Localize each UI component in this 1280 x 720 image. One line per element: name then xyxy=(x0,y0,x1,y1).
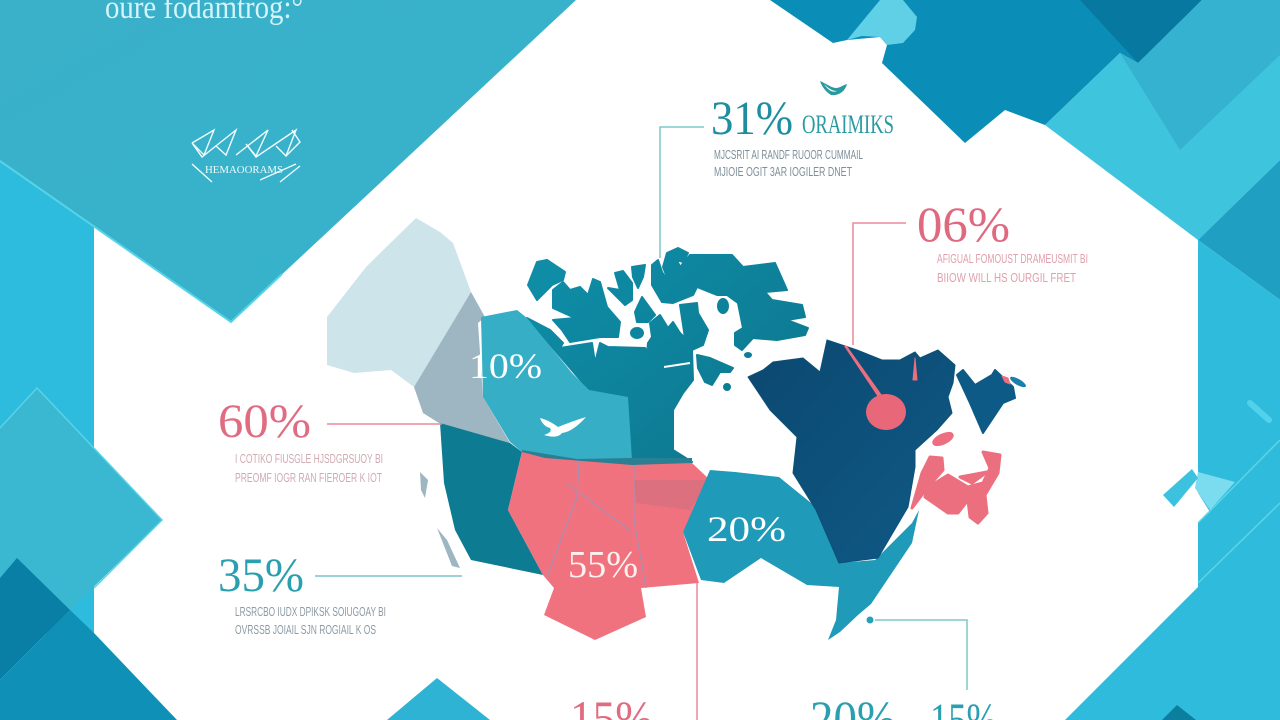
map region: cyan 10% province xyxy=(481,310,632,462)
callout: 31%: MJIOIE OGIT 3AR IOGILER DNET xyxy=(714,164,852,179)
callout: 31%: ORAIMIKS xyxy=(802,110,894,139)
map region: darker coral shade xyxy=(634,480,710,510)
callout: 60%: PREOMF IOGR RAN FIEROER K IOT xyxy=(235,470,382,485)
callout: 35%: OVRSSB JOIAIL SJN ROGIAIL K OS xyxy=(235,622,376,637)
callout: 31%: MJCSRIT AI RANDF RUOOR CUMMAIL xyxy=(714,147,863,162)
map region: small east islet xyxy=(1009,375,1027,389)
map region: dark teal boundary band xyxy=(522,450,692,466)
map region: grey wedge xyxy=(414,292,510,443)
callout: 06%: BIIOW WILL HS OURGIL FRET xyxy=(937,270,1076,285)
icon: white bird on map xyxy=(540,417,586,437)
map label: 55%: 55% xyxy=(568,544,638,586)
callout: 35% xyxy=(218,549,462,637)
callout: 60%: 60% xyxy=(218,395,311,448)
callout: 06%: 06% xyxy=(917,196,1010,252)
map label: 20%: 20% xyxy=(707,509,786,549)
map region: western teal xyxy=(440,423,543,575)
icon: white hand-drawn emblem xyxy=(192,130,300,182)
callout: 31% xyxy=(660,81,894,258)
icon: small bird xyxy=(820,81,847,95)
map region: white sliver on mainland xyxy=(664,363,690,367)
map region: province lines xyxy=(547,462,646,588)
panel: Canada map xyxy=(327,218,1027,640)
callout: 06%: AFIGUAL FOMOUST DRAMEUSMIT BI xyxy=(937,251,1088,266)
callout: 60% xyxy=(218,395,442,485)
map region: navy Quebec xyxy=(748,340,955,563)
callout: 35%: 35% xyxy=(218,549,304,602)
callout: 35%: LRSRCBO IUDX DPIKSK SOIUGOAY BI xyxy=(235,604,386,619)
map region: coral east provinces xyxy=(912,358,1010,523)
callout: 31%: 31% xyxy=(711,92,793,145)
icon: map pin xyxy=(844,346,906,430)
map region: pale northwest xyxy=(327,218,471,387)
map region: teal 20% province xyxy=(683,470,919,640)
map label: 10%: 10% xyxy=(469,346,542,386)
callout: 60%: I COTIKO FIUSGLE HJSDGRSUOY BI xyxy=(235,451,383,466)
map region: northern teal mainland and Arctic islands xyxy=(527,248,808,464)
callout: 20% and 15% bottom right xyxy=(810,616,997,720)
map region: navy east island xyxy=(957,370,1015,433)
map region: coral 55% province xyxy=(508,452,710,640)
icon: white hand-drawn emblem: HEMAOORAMS xyxy=(205,164,283,176)
map region: island slivers xyxy=(420,472,460,568)
callout: 06% xyxy=(853,196,1088,345)
